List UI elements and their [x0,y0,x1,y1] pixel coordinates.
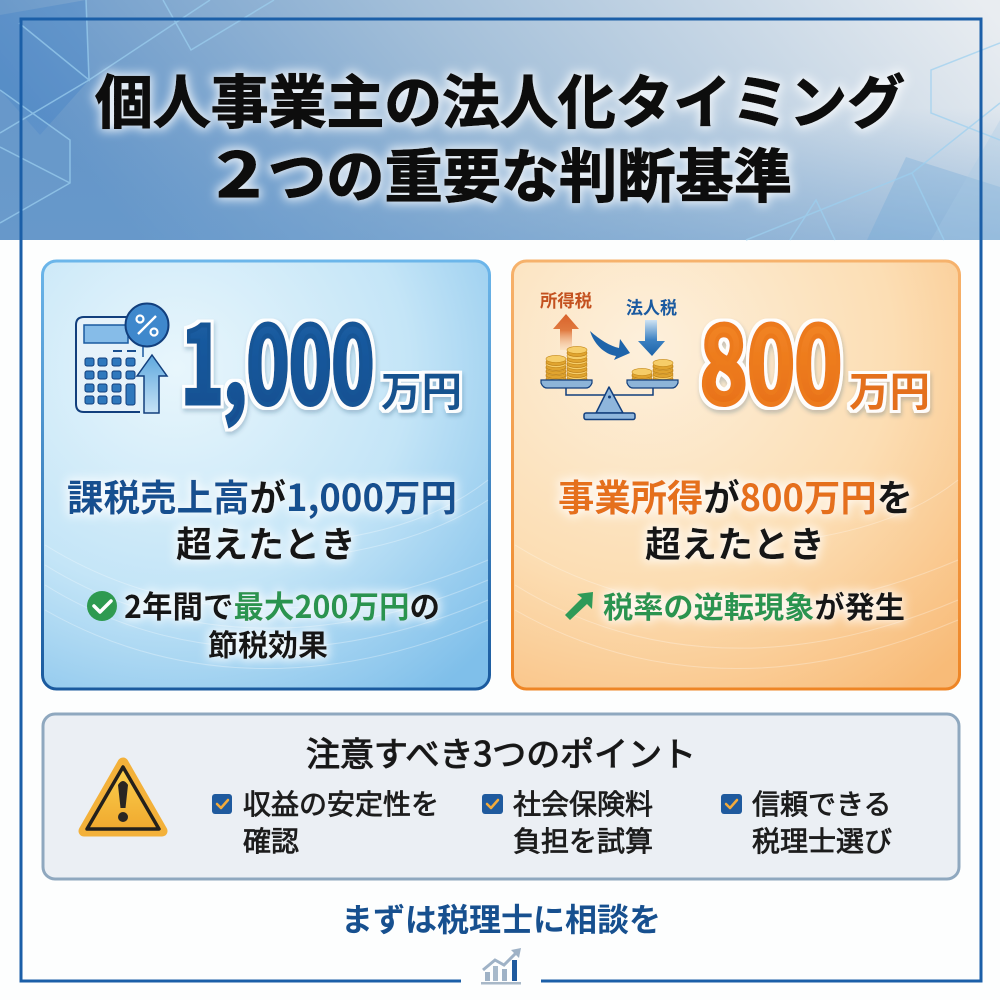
icon: tax balance scale: 法人税 [626,295,677,320]
number: 800万円: 800 [700,282,842,434]
item: revenue stability [212,783,439,860]
header banner [0,0,1000,240]
title: つの重要な判断基準 [268,130,792,214]
heading: left criterion: 課税売上高が1,000万円 [67,468,457,522]
panel: caution points [43,714,959,879]
item: tax accountant: 税理士選び [752,820,892,860]
item: social insurance: 社会保険料 [513,783,653,823]
item: social insurance: 負担を試算 [513,820,653,860]
icon: tax balance scale: 所得税 [540,288,592,313]
icon: green up arrow [565,592,593,620]
footer call to action: まずは税理士に相談を [341,895,661,941]
text: savings [124,582,440,665]
panel: 800万円 [512,261,960,689]
decorative wave lines [515,480,958,669]
title: 個人事業主の法人化タイミング [95,56,905,140]
item: tax accountant [721,783,892,860]
item: social insurance [482,783,653,860]
icon: tax balance scale [540,288,678,420]
text: tax reversal: 税率の逆転現象が発生 [603,583,905,627]
number: 1,000万円: 1,000 [181,282,374,434]
icon: calculator with percent and arrow [76,304,168,413]
item: revenue stability: 収益の安定性を [243,783,439,823]
item: tax accountant: 信頼できる [752,783,891,823]
text: savings: 2年間で最大200万円の [124,582,440,627]
item: revenue stability: 確認 [243,820,299,860]
number: 1,000万円: 万円 [381,358,462,418]
heading: left criterion [67,468,457,568]
title [95,56,905,215]
icon: green check [87,591,117,621]
heading: left criterion: 超えたとき [176,516,356,568]
heading: right criterion [558,468,913,568]
heading: right criterion: 超えたとき [645,516,825,568]
heading: caution: 注意すべき3つのポイント [306,727,696,776]
number: 800万円: 万円 [849,358,930,418]
heading: right criterion: 事業所得が800万円を [558,468,913,522]
decorative wave lines [45,480,488,669]
icon: warning triangle [84,763,162,831]
title: 2 [216,125,262,215]
panel: 1,000万円 [42,261,490,689]
text: savings: 節税効果 [208,621,328,665]
icon: growth chart [481,948,521,984]
